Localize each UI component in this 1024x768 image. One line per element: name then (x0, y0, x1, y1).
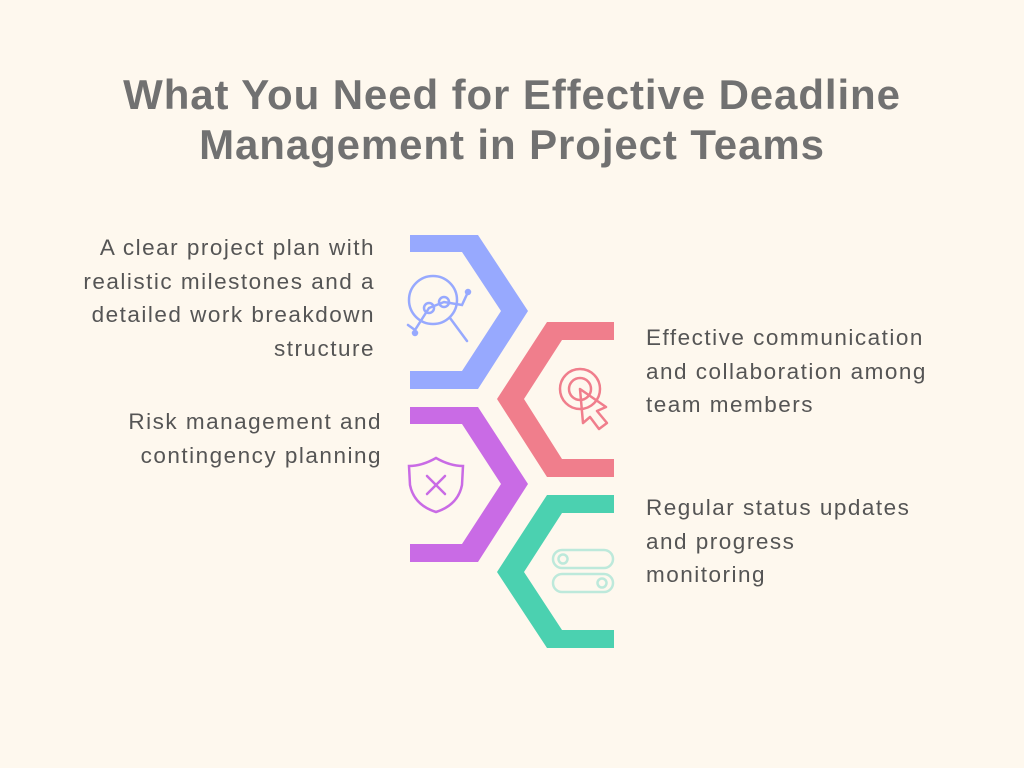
chevron: purple (409, 407, 528, 562)
chevron: green (497, 495, 614, 648)
title (123, 71, 901, 168)
text: project plan (83, 235, 375, 360)
text: status updates: Regular status updates (646, 495, 910, 520)
text: status updates: monitoring (646, 562, 766, 587)
icon: chart magnifier (408, 276, 470, 341)
text: risk management: Risk management and (128, 409, 382, 434)
title: Management in Project Teams (199, 121, 825, 168)
text: project plan: A clear project plan with (100, 235, 375, 260)
chevron: blue (408, 235, 528, 389)
icon: target cursor (560, 369, 607, 429)
text: risk management: contingency planning (141, 442, 382, 468)
text: communication: and collaboration among (646, 358, 927, 384)
text: risk management (128, 409, 382, 468)
text: communication (646, 325, 927, 417)
text: project plan: realistic milestones and a (83, 268, 375, 294)
text: status updates (646, 495, 910, 587)
text: status updates: and progress (646, 528, 795, 554)
text: project plan: detailed work breakdown (92, 302, 375, 327)
icon: toggles (553, 550, 613, 592)
text: communication: team members (646, 392, 814, 417)
text: project plan: structure (274, 336, 375, 360)
text: communication: Effective communication (646, 325, 924, 350)
chevron: red (497, 322, 614, 477)
title: What You Need for Effective Deadline (123, 71, 901, 118)
icon: shield x (409, 458, 463, 512)
